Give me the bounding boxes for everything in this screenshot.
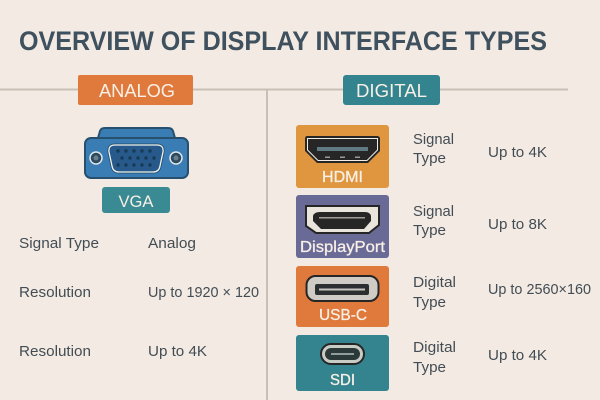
badge: digital: DIGITAL	[356, 81, 427, 101]
digital specs: DisplayPort: Up to 8K	[488, 216, 547, 233]
badge: VGA	[102, 187, 170, 213]
card: HDMI: HDMI	[322, 169, 363, 186]
card: DisplayPort	[296, 195, 389, 258]
badge: digital	[343, 75, 440, 105]
icon: VGA connector	[85, 128, 188, 178]
analog specs	[19, 235, 259, 360]
digital specs: DisplayPort: Signal	[413, 203, 454, 220]
card: HDMI	[296, 125, 389, 188]
digital specs: HDMI: Up to 4K	[488, 144, 547, 161]
digital specs: USB-C: Type	[413, 294, 446, 311]
card: USB-C: USB-C	[319, 307, 367, 324]
digital specs: DisplayPort: Type	[413, 222, 446, 239]
digital specs: SDI: Type	[413, 359, 446, 376]
digital specs: USB-C: Up to 2560×160	[488, 281, 591, 298]
digital specs: USB-C	[413, 274, 591, 311]
digital specs: USB-C: Digital	[413, 274, 456, 291]
card: USB-C	[296, 266, 389, 327]
title: OVERVIEW OF DISPLAY INTERFACE TYPES	[19, 26, 547, 56]
card: DisplayPort: DisplayPort	[300, 239, 386, 256]
badge: VGA: VGA	[118, 193, 154, 211]
analog specs: Resolution	[19, 343, 91, 360]
badge: analog: ANALOG	[99, 81, 175, 101]
card: SDI	[296, 335, 389, 391]
digital specs: SDI: Digital	[413, 339, 456, 356]
analog specs: Signal Type	[19, 235, 99, 252]
badge: analog	[78, 75, 193, 105]
card: SDI: SDI	[330, 372, 355, 389]
analog specs: Resolution	[19, 284, 91, 301]
analog specs: Up to 1920 × 120	[148, 284, 259, 301]
analog specs: Up to 4K	[148, 343, 207, 360]
digital specs: DisplayPort	[413, 203, 547, 239]
digital specs: SDI: Up to 4K	[488, 347, 547, 364]
digital specs: SDI	[413, 339, 547, 376]
digital specs: HDMI	[413, 131, 547, 167]
analog specs: Analog	[148, 235, 196, 252]
digital specs: HDMI: Signal	[413, 131, 454, 148]
digital specs: HDMI: Type	[413, 150, 446, 167]
